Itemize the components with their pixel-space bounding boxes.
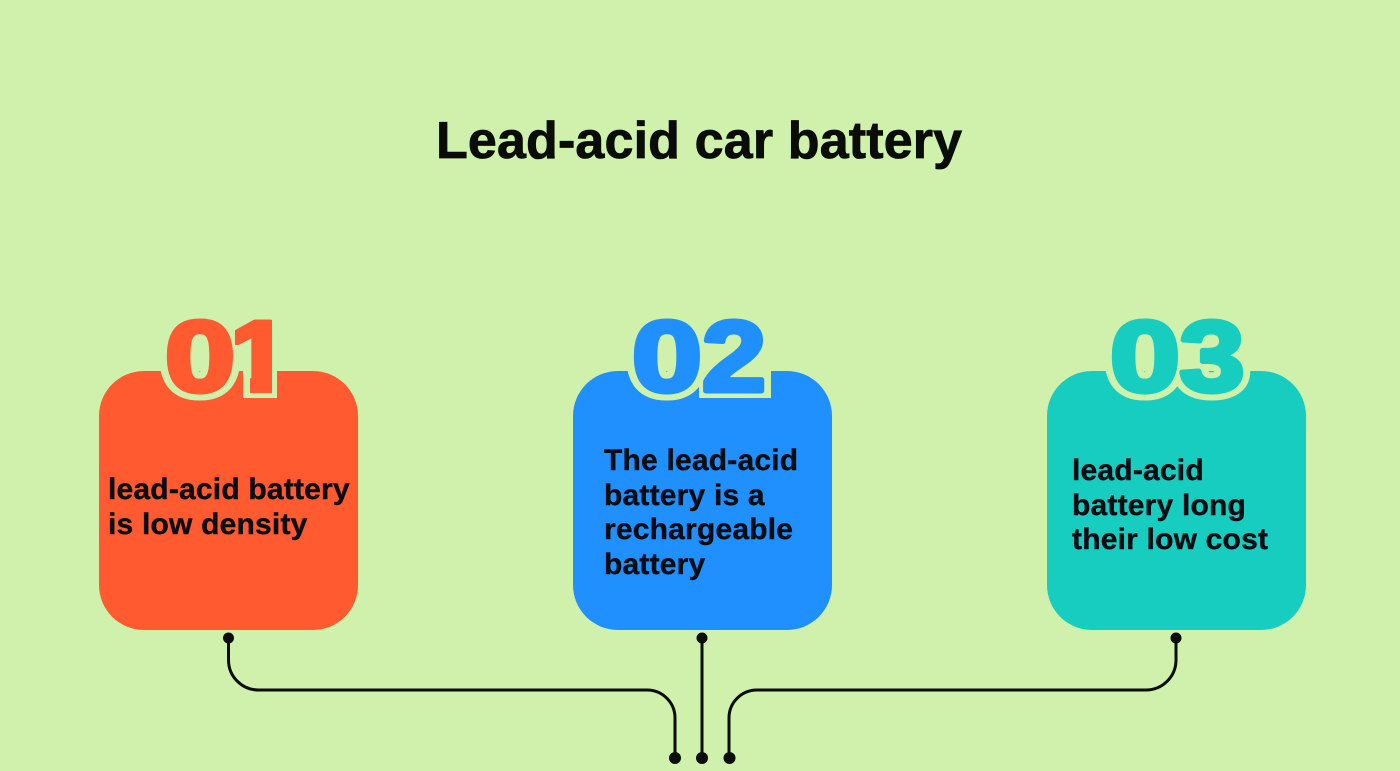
card 01 background	[99, 371, 358, 630]
number 01: 0	[165, 301, 235, 413]
card 02 text: battery	[604, 548, 706, 581]
number 03: 0	[1110, 301, 1180, 413]
panel: card 01	[99, 301, 358, 630]
card 03 background	[1047, 371, 1306, 630]
number 02: 2	[702, 301, 766, 413]
number 01: 0	[165, 301, 235, 413]
number 01: 1	[227, 301, 292, 413]
panel: card 02	[573, 301, 832, 630]
panel: card 03	[1047, 301, 1306, 630]
card 01 text: is low density	[108, 508, 308, 541]
card 03 text: battery long	[1072, 489, 1246, 522]
number 02: 0	[632, 301, 702, 413]
card 01 text: lead-acid battery	[108, 473, 350, 506]
title: Lead-acid car battery	[436, 112, 962, 170]
number 03: 3	[1180, 301, 1244, 413]
card 03 text: their low cost	[1072, 523, 1268, 556]
card 02 text: The lead-acid	[604, 444, 798, 477]
card 02 text: rechargeable	[604, 513, 793, 546]
card 02 background	[573, 371, 832, 630]
number 03: 3	[1180, 301, 1244, 413]
number 03: 0	[1110, 301, 1180, 413]
connector: card 02 to bottom	[696, 632, 708, 764]
number 02: 0	[632, 301, 702, 413]
number 01	[160, 318, 277, 400]
number 03	[1110, 301, 1244, 413]
card 02 text: battery is a	[604, 479, 765, 512]
connector: card 03 to bottom	[724, 632, 1182, 764]
number 02	[632, 301, 771, 413]
connector: card 01 to bottom	[223, 632, 681, 764]
card 03 text: lead-acid	[1072, 454, 1204, 487]
